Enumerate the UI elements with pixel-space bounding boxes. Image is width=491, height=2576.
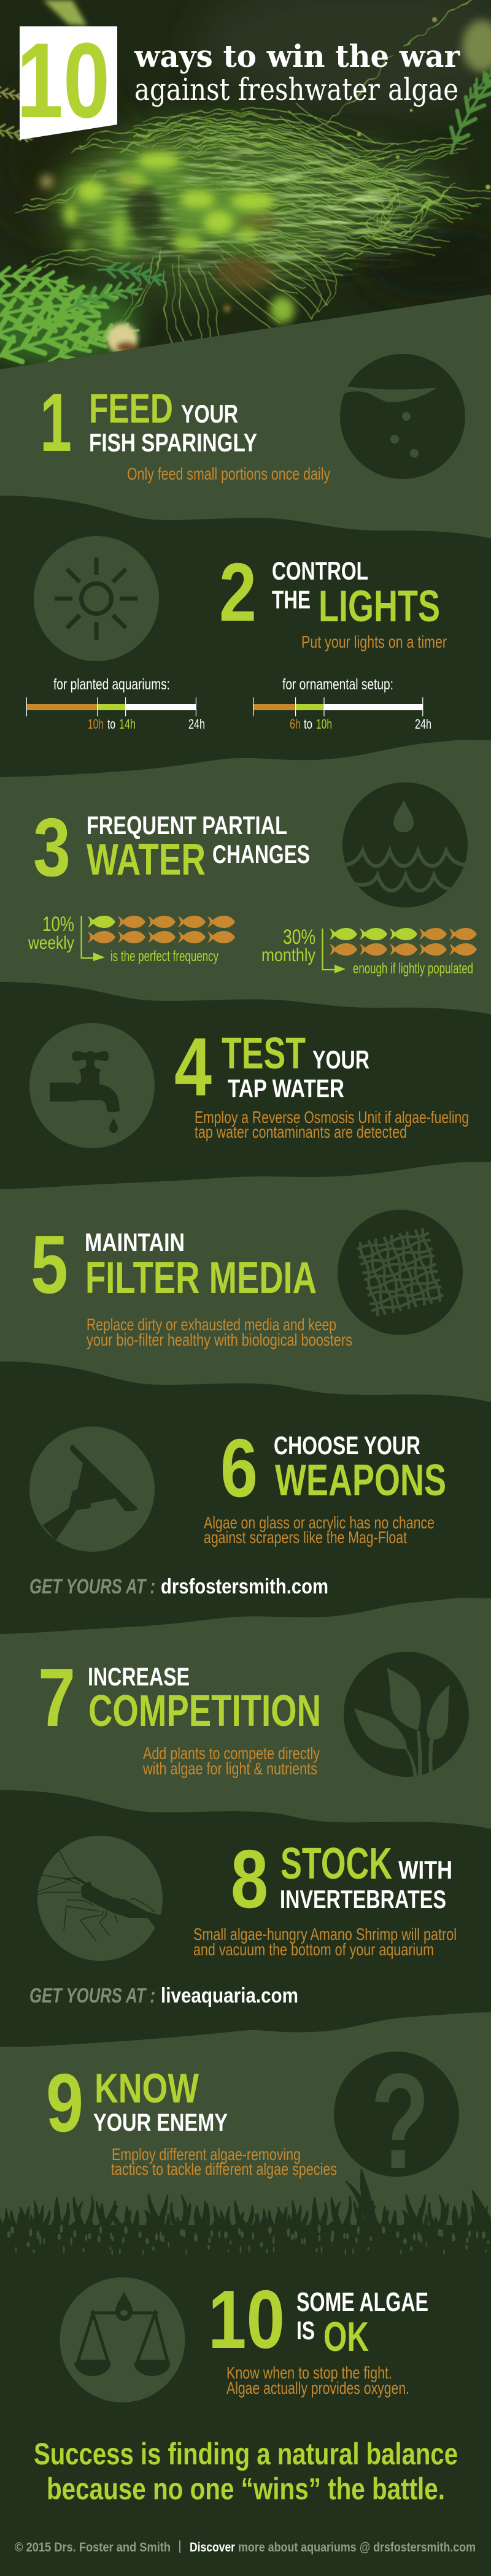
heading: TEST bbox=[222, 1029, 306, 1078]
icon: plant leaves bbox=[344, 1652, 469, 1777]
title badge: 10: 10 bbox=[17, 20, 110, 140]
heading: CHOOSE YOUR bbox=[274, 1431, 420, 1460]
icon: water drop and waves bbox=[341, 783, 470, 908]
description bbox=[87, 1315, 352, 1349]
band: dark wave section 6 bbox=[0, 1362, 491, 1634]
icon: sun bbox=[34, 536, 159, 661]
link: drsfostersmith.com bbox=[29, 1575, 328, 1598]
panel: tip 7 increase competition bbox=[38, 1651, 469, 1778]
timeline: planted aquariums: to bbox=[107, 716, 115, 732]
heading bbox=[222, 1029, 369, 1103]
heading: WITH bbox=[398, 1855, 452, 1884]
timeline: planted aquariums bbox=[26, 676, 205, 732]
chart: 10% weekly fish: is the perfect frequency bbox=[110, 948, 218, 965]
chart: 10% weekly fish bbox=[28, 913, 235, 965]
snail bbox=[107, 305, 230, 354]
description: tap water contaminants are detected bbox=[195, 1122, 407, 1141]
heading: THE bbox=[272, 585, 311, 614]
number 3: 3 bbox=[33, 801, 71, 894]
description: Algae actually provides oxygen. bbox=[226, 2379, 409, 2398]
title: ways to win the war bbox=[134, 38, 460, 74]
heading: FEED bbox=[89, 385, 173, 432]
timeline: ornamental setup: 24h bbox=[415, 716, 431, 732]
description: Replace dirty or exhausted media and keep bbox=[87, 1315, 336, 1334]
heading: FREQUENT PARTIAL bbox=[87, 811, 287, 840]
panel: tip 2 control the lights bbox=[26, 536, 447, 732]
number 8: 8 bbox=[231, 1833, 268, 1925]
heading: IS bbox=[296, 2316, 315, 2345]
description: Put your lights on a timer bbox=[301, 632, 447, 651]
link: drsfostersmith.com: GET YOURS AT : bbox=[29, 1575, 155, 1598]
panel: tip 5 maintain filter media bbox=[31, 1209, 463, 1349]
heading: SOME ALGAE bbox=[296, 2287, 428, 2317]
chart: 10% weekly fish: 10% bbox=[42, 913, 74, 936]
heading: YOUR ENEMY bbox=[93, 2109, 228, 2136]
link: liveaquaria.com: GET YOURS AT : bbox=[29, 1984, 155, 2007]
description bbox=[111, 2145, 337, 2179]
chart: 30% monthly fish: monthly bbox=[261, 945, 315, 965]
icon: question mark bbox=[334, 2045, 459, 2198]
panel: tip 8 stock with invertebrates bbox=[29, 1833, 457, 2007]
band: dark wave section 2 bbox=[0, 496, 491, 777]
icon: algae scraper bbox=[29, 1427, 155, 1552]
timeline: planted aquariums: 24h bbox=[188, 716, 205, 732]
panel: tip 3 partial water changes bbox=[28, 783, 477, 977]
description: Know when to stop the fight. bbox=[226, 2363, 392, 2382]
heading bbox=[280, 1839, 452, 1914]
heading: KNOW bbox=[95, 2065, 199, 2112]
heading bbox=[89, 385, 257, 457]
number 4: 4 bbox=[174, 1021, 212, 1113]
icon: balance scales bbox=[60, 2277, 185, 2402]
algae strands bbox=[16, 0, 491, 355]
panel: tip 4 test tap water bbox=[29, 1021, 469, 1148]
number 6: 6 bbox=[220, 1422, 258, 1514]
panel: tip 6 choose your weapons bbox=[29, 1422, 446, 1598]
fern fronds bbox=[0, 285, 141, 365]
panel: tip 9 know your enemy bbox=[46, 2045, 459, 2198]
band: dark wave section 4 bbox=[0, 982, 491, 1189]
icon: filter mesh bbox=[338, 1209, 463, 1335]
description: Employ different algae-removing bbox=[112, 2145, 301, 2164]
timeline: ornamental setup: 10h bbox=[316, 716, 332, 732]
band: dark wave section 8 bbox=[0, 1790, 491, 2047]
heading: FILTER MEDIA bbox=[85, 1254, 317, 1303]
title bbox=[134, 38, 460, 107]
icon: dripping tap bbox=[29, 1023, 155, 1148]
footer credits bbox=[15, 2540, 476, 2555]
heading bbox=[296, 2287, 428, 2360]
header photo: freshwater algae bbox=[0, 0, 491, 374]
description bbox=[204, 1513, 435, 1547]
number 9: 9 bbox=[46, 2057, 83, 2149]
icon: food sinking in water bbox=[340, 354, 465, 479]
heading: CONTROL bbox=[272, 556, 368, 585]
icon: amano shrimp bbox=[37, 1836, 164, 1961]
description bbox=[193, 1925, 457, 1959]
number 2: 2 bbox=[219, 546, 257, 638]
heading bbox=[274, 1431, 446, 1505]
timeline: ornamental setup: to bbox=[304, 716, 312, 732]
heading: COMPETITION bbox=[88, 1687, 321, 1736]
heading: FISH SPARINGLY bbox=[89, 428, 257, 457]
timeline: planted aquariums: for planted aquariums: bbox=[53, 676, 170, 693]
algae bright clumps bbox=[68, 153, 264, 258]
description bbox=[142, 1744, 320, 1778]
grass silhouette and dark footer section bbox=[0, 2170, 491, 2576]
number 1: 1 bbox=[40, 376, 72, 469]
heading: YOUR bbox=[312, 1045, 369, 1074]
heading: YOUR bbox=[181, 399, 238, 428]
description: Add plants to compete directly bbox=[143, 1744, 320, 1763]
heading: LIGHTS bbox=[319, 582, 440, 631]
algae fibres bbox=[80, 147, 423, 264]
description bbox=[226, 2363, 409, 2398]
heading bbox=[88, 1662, 321, 1736]
panel: tip 1 feed sparingly bbox=[40, 354, 465, 483]
heading bbox=[85, 1228, 317, 1303]
timeline: planted aquariums: 14h bbox=[119, 716, 136, 732]
link: liveaquaria.com: liveaquaria.com bbox=[161, 1984, 298, 2007]
icon: question mark: ? bbox=[371, 2045, 430, 2198]
heading bbox=[272, 556, 440, 631]
footer credits: Discover bbox=[190, 2540, 235, 2555]
heading: TAP WATER bbox=[228, 1074, 344, 1103]
number 7: 7 bbox=[38, 1651, 75, 1744]
panel: tip 10 some algae is ok bbox=[60, 2273, 428, 2402]
heading: INVERTEBRATES bbox=[280, 1885, 446, 1914]
heading: STOCK bbox=[280, 1839, 392, 1888]
timeline: ornamental setup bbox=[253, 676, 431, 732]
number 5: 5 bbox=[31, 1218, 68, 1311]
number 10: 10 bbox=[208, 2273, 285, 2366]
link: drsfostersmith.com: drsfostersmith.com bbox=[161, 1575, 328, 1598]
heading: MAINTAIN bbox=[85, 1228, 185, 1257]
timeline: ornamental setup: for ornamental setup: bbox=[282, 676, 393, 693]
timeline: planted aquariums: 10h bbox=[88, 716, 104, 732]
description: tactics to tackle different algae species bbox=[111, 2160, 337, 2179]
heading: OK bbox=[323, 2313, 369, 2360]
link: liveaquaria.com bbox=[29, 1984, 298, 2007]
footer credits: © 2015 Drs. Foster and Smith bbox=[15, 2540, 171, 2555]
chart: 30% monthly fish: 30% bbox=[283, 926, 315, 949]
timeline: ornamental setup: 6h bbox=[290, 716, 301, 732]
chart: 30% monthly fish bbox=[261, 926, 477, 977]
description: against scrapers like the Mag-Float bbox=[204, 1528, 407, 1547]
heading: INCREASE bbox=[88, 1662, 190, 1691]
description: Only feed small portions once daily bbox=[127, 464, 330, 483]
heading bbox=[93, 2065, 228, 2136]
description bbox=[195, 1108, 469, 1141]
chart: 10% weekly fish: weekly bbox=[28, 933, 74, 953]
heading bbox=[87, 811, 310, 884]
heading: CHANGES bbox=[212, 840, 310, 868]
description: your bio-filter healthy with biological boosters bbox=[87, 1330, 352, 1349]
closing statement bbox=[34, 2437, 458, 2506]
description: with algae for light & nutrients bbox=[142, 1759, 317, 1778]
heading: WATER bbox=[87, 835, 206, 884]
